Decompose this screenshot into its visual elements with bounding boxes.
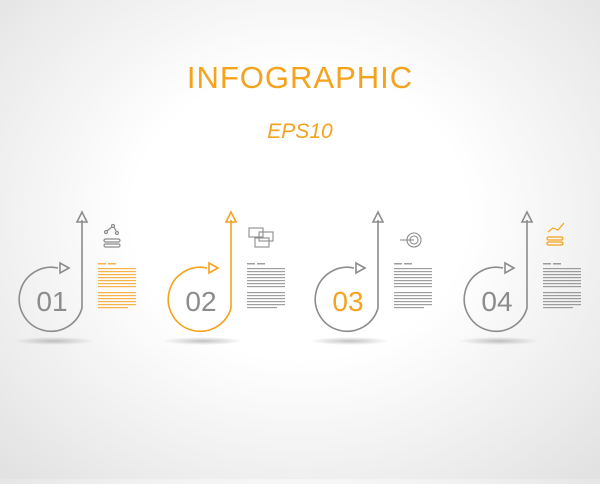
step 1 — [14, 212, 136, 345]
text block — [98, 263, 136, 308]
text block — [394, 263, 432, 308]
icon: network — [104, 224, 120, 247]
text block — [247, 263, 285, 308]
step 2 — [163, 212, 285, 345]
step 4: 04 — [481, 286, 513, 317]
title: INFOGRAPHIC — [187, 60, 413, 95]
icon: target — [400, 233, 421, 247]
icon: growth chart — [547, 223, 564, 245]
step 3: 03 — [332, 286, 364, 317]
step 3 — [310, 212, 432, 345]
step 2: 02 — [185, 286, 217, 317]
subtitle: EPS10 — [267, 120, 333, 143]
text block — [543, 263, 581, 308]
step 4 — [459, 212, 581, 345]
icon: chat — [249, 228, 273, 247]
step 1: 01 — [36, 286, 68, 317]
